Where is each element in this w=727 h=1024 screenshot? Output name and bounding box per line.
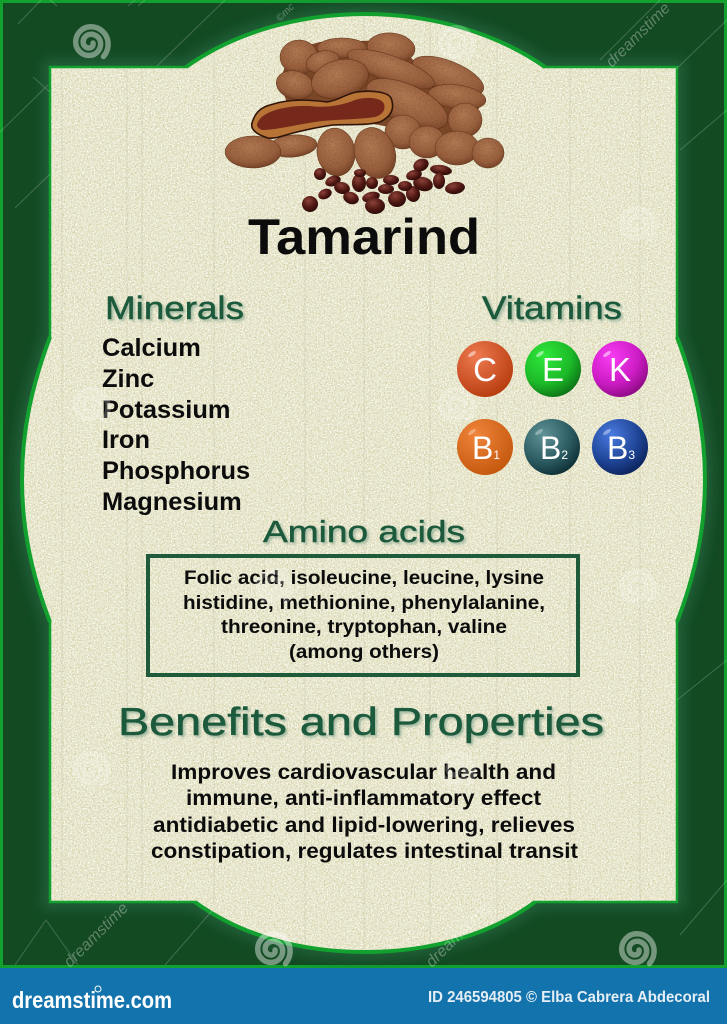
title: Tamarind: [248, 209, 480, 265]
footer logo: dreamstime.com: [12, 987, 172, 1013]
heading: minerals: Minerals: [105, 290, 244, 326]
footer credit: ID 246594805 © Elba Cabrera Abdecoral: [428, 989, 710, 1006]
stock watermark: dreamstime: [603, 0, 674, 71]
opened pod: [252, 91, 393, 138]
stock watermark: dreamstime: [423, 900, 494, 971]
vitamin K: [592, 341, 648, 397]
mineral list: Calcium: [102, 334, 201, 362]
vitamin E: [525, 341, 581, 397]
vitamin B2: [524, 419, 580, 475]
mineral list: Iron: [102, 426, 150, 454]
amino acids box: histidine, methionine, phenylalanine,: [183, 592, 545, 614]
heading: vitamins: Vitamins: [482, 290, 622, 326]
vitamin B1: 1: [493, 448, 500, 462]
benefits text: Improves cardiovascular health and: [171, 761, 556, 784]
stock watermark: dreamstime: [61, 900, 132, 971]
vitamin B3: 3: [628, 448, 635, 462]
vitamin B2: 2: [561, 448, 568, 462]
benefits text: immune, anti-inflammatory effect: [186, 787, 541, 810]
mineral list: Potassium: [102, 396, 230, 424]
mineral list: Magnesium: [102, 488, 242, 516]
amino acids box: Folic acid, isoleucine, leucine, lysine: [184, 567, 544, 589]
illustration: tamarind pods and seeds: [225, 31, 504, 214]
vitamin B1: [457, 419, 513, 475]
vitamin K: K: [609, 351, 631, 388]
seeds: [302, 156, 466, 214]
mineral list: Zinc: [102, 365, 154, 393]
vitamin B1: B: [472, 430, 493, 466]
pods shadow backing: [280, 40, 482, 135]
footer bar: [0, 968, 727, 1024]
mineral list: [102, 334, 250, 516]
vitamin B3: B: [607, 430, 628, 466]
heading: benefits and properties: Benefits and Properties: [118, 701, 604, 744]
vitamin E: E: [542, 351, 564, 388]
stock watermark: ©mc: [274, 2, 297, 24]
amino acids box: threonine, tryptophan, valine: [221, 616, 507, 638]
amino acids box: [148, 556, 578, 675]
vitamin B2: B: [540, 430, 561, 466]
vitamin C: C: [473, 351, 497, 388]
benefits text: constipation, regulates intestinal transit: [151, 840, 578, 863]
amino acids box: (among others): [289, 641, 439, 663]
heading: amino acids: Amino acids: [263, 514, 465, 549]
vitamin C: [457, 341, 513, 397]
mineral list: Phosphorus: [102, 457, 250, 485]
benefits text: antidiabetic and lipid-lowering, relieves: [153, 814, 575, 837]
benefits text: [151, 761, 578, 863]
vitamin spheres: [457, 341, 648, 475]
vitamin B3: [592, 419, 648, 475]
